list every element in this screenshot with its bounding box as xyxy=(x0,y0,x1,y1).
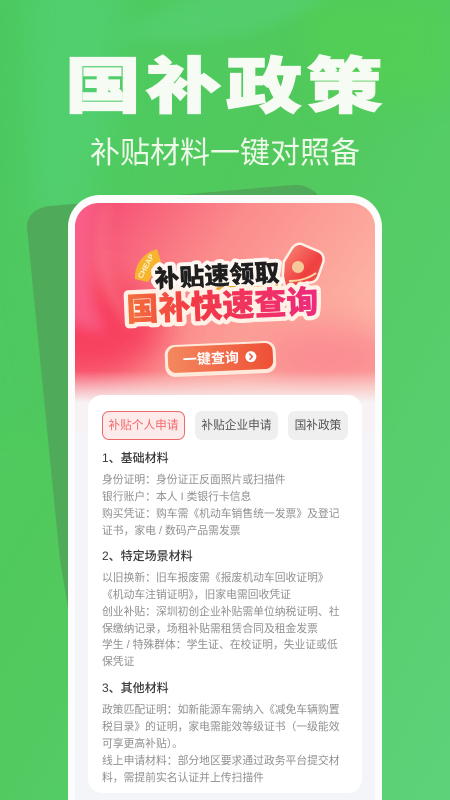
section 2: scenario materials: 保缴纳记录，场租补贴需租赁合同及租金发票 xyxy=(102,623,318,635)
query button xyxy=(164,341,277,377)
section 3: other materials: 3、其他材料 xyxy=(102,681,169,695)
phone frame xyxy=(68,195,382,800)
section 2: scenario materials xyxy=(102,549,340,668)
section 3: other materials: 政策匹配证明：如新能源车需纳入《减免车辆购置 xyxy=(102,704,340,716)
section 2: scenario materials: 《机动车注销证明》，旧家电需回收凭证 xyxy=(102,589,291,601)
section 1: basic materials: 购买凭证：购车需《机动车销售统一发票》及登记 xyxy=(102,508,340,520)
heading: gradient line: 国补快速查询 xyxy=(125,277,319,331)
tab: personal, active xyxy=(102,411,185,440)
section 1: basic materials: 证书，家电 / 数码产品需发票 xyxy=(102,525,241,537)
section 3: other materials: 线上申请材料：部分地区要求通过政务平台提交材 xyxy=(102,755,340,767)
section 3: other materials: 料，需提前实名认证并上传扫描件 xyxy=(102,772,264,784)
back card: dark green tilted panel xyxy=(27,185,340,620)
tab: enterprise: 补贴企业申请 xyxy=(201,419,272,432)
section 1: basic materials xyxy=(102,451,340,537)
tab: personal, active: 补贴个人申请 xyxy=(108,419,179,432)
section 2: scenario materials: 以旧换新：旧车报废需《报废机动车回收证明》 xyxy=(102,572,329,584)
banner headline artwork xyxy=(124,242,325,377)
section 1: basic materials: 身份证明：身份证正反面照片或扫描件 xyxy=(102,474,286,486)
section 2: scenario materials: 2、特定场景材料 xyxy=(102,549,193,563)
icon: CHEAP tag: CHEAP xyxy=(136,253,156,280)
heading: black line: 补贴速领取 xyxy=(154,253,280,296)
tab: policy: 国补政策 xyxy=(295,419,341,432)
section 2: scenario materials: 保凭证 xyxy=(102,656,134,668)
section 3: other materials: 可享更高补贴）。 xyxy=(102,738,183,750)
content card background xyxy=(88,395,362,793)
heading: gradient line: 国补快速查询 xyxy=(125,277,319,331)
icon: CHEAP tag xyxy=(135,249,161,282)
tab: enterprise xyxy=(195,411,278,440)
subtitle: 补贴材料一键对照备 xyxy=(90,128,360,172)
section 1: basic materials: 1、基础材料 xyxy=(102,451,169,465)
section 3: other materials: 税目录》的证明，家电需能效等级证书（一级能效 xyxy=(102,721,340,733)
icon: red packet xyxy=(284,245,322,290)
tab: policy xyxy=(288,411,348,440)
heading: black line: 补贴速领取 xyxy=(154,253,280,296)
screen background xyxy=(75,203,375,800)
section 2: scenario materials: 学生 / 特殊群体：学生证、在校证明，失业证或低 xyxy=(102,639,338,651)
section 1: basic materials: 银行账户：本人 I 类银行卡信息 xyxy=(102,491,251,503)
banner art: pink and coral gradient xyxy=(75,203,375,402)
title: 国补政策 xyxy=(65,37,387,125)
query button: 一键查询 xyxy=(183,347,239,370)
section 3: other materials xyxy=(102,681,340,784)
section 2: scenario materials: 创业补贴：深圳初创企业补贴需单位纳税证明、社 xyxy=(102,606,340,618)
